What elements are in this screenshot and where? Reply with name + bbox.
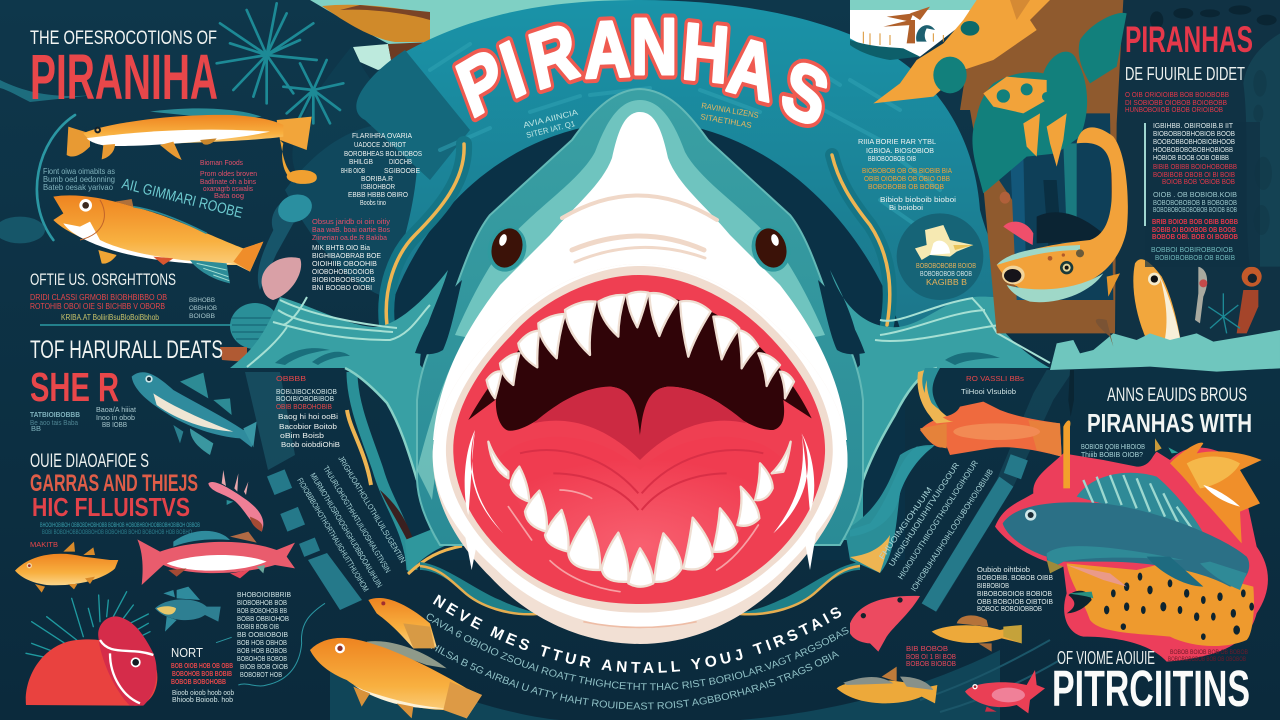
big teal arch behind title: [380, 0, 1003, 380]
eye: right: [746, 221, 796, 277]
text block: right teal band white and orange: [858, 137, 956, 212]
text block: lower-left column: BOB HOB OBHOB: [237, 638, 287, 647]
text block: lower-left top notes: OBBBB: [276, 374, 306, 383]
panel: right column text: BOBOBOBOBOB B BOBOBOB: [1153, 198, 1237, 207]
title: R: [522, 6, 585, 107]
panel: right column text: BOBIOBOBBOB OB BOBIB: [1155, 253, 1235, 262]
rotated text left: JRIGHUOATHOLLOTHILUILSUGENTIIN: [336, 454, 407, 565]
text block: small red near fish: BOB OI 1 BI BOB: [906, 654, 956, 661]
red blob: [995, 448, 1268, 662]
text block: left intro: Bateb oesak yarivao: [43, 183, 114, 192]
tongue: [500, 387, 780, 592]
text block: right teal band white and orange: BBIOBOOBOB OIB: [868, 154, 916, 163]
head stripes left: [417, 330, 470, 500]
curved fine print: CAVIA 6 OBIOIO ZSOUAI ROATT THIGHCETHT THAC RIST BORIOLAR.VAGT ARGSOBAS: [426, 614, 849, 690]
title: H: [680, 6, 732, 101]
panel: right column text: BOOBOBBOBHOBIOBHOOB: [1153, 137, 1235, 146]
text block: lower-left top notes: OBIB BOBOHOBIB: [276, 402, 332, 411]
text block: small red near fish: BIB BOBOB: [906, 646, 948, 653]
rotated text left: THUURLOHOGTHHATUIUIOSHIALGTIVSIN: [321, 464, 392, 575]
text block: top centre-left: BORIBA.R: [361, 174, 394, 183]
text block: red lines: [30, 293, 217, 322]
rotated text right: UHIOIGHUIOIUIHITVUIOGOUR: [887, 461, 961, 568]
text block: lower-left top notes: Baog hi hoi ooBi: [278, 412, 338, 421]
text block: red and white notes: Obsus jaridb oi oin oitiy: [312, 217, 390, 226]
title: P: [447, 31, 516, 135]
text block: caption on red blob: BOBOBOBOBOB BOB OB OBOBOB: [1168, 656, 1246, 663]
dark oval behind caption: [897, 213, 983, 300]
text block: lower-left column: [237, 590, 291, 679]
foam: [1050, 330, 1280, 372]
title: A: [722, 20, 782, 119]
lower teal bands with yellow edge: [420, 562, 860, 614]
label: Nort block: BOBOB BOBOHOBB: [171, 679, 226, 686]
text block: red mid: Prom oldes broven: [200, 169, 257, 178]
orange canopy: [873, 0, 1050, 103]
text block: top centre-left: EBBB HBBB OBIRO: [348, 190, 408, 199]
second upright fish: [1133, 259, 1182, 347]
text block: top centre-left: BHIB OIOB: [341, 166, 365, 175]
caption under burst: BOBOBOBOB OBOB: [920, 271, 972, 278]
text block: red and white notes: Ziinerian oa.de.R Bakiba: [312, 233, 388, 242]
text block: right teal band white and orange: BIOBOBOB OB OB BIOBIB BIA: [862, 166, 952, 175]
text block: red lines: ROTOHIB OBOI OIE SI BICHBB V OBORB: [30, 302, 165, 311]
red fish on band: [850, 380, 1062, 537]
label: Nort block: [171, 645, 234, 704]
title: A: [583, 4, 631, 96]
dark right column: [1117, 0, 1280, 360]
tree top: [883, 7, 930, 43]
left shark fin: [230, 270, 465, 574]
dark grill: [1037, 212, 1110, 243]
shark mouth: [433, 264, 848, 644]
text block: red and white notes: BIGHIBAOBRAB BOE: [312, 251, 381, 260]
lower teeth: [488, 442, 791, 587]
text block: caption on red blob: [1168, 649, 1248, 663]
small text under title right: RAVINIA LIZENS: [701, 101, 759, 120]
text block: red lines: DRIDI CLASSI GRMOBI BIOBHBIBBO OB: [30, 293, 167, 302]
long orange fish: [67, 108, 317, 184]
text block: lower-left top notes: BOBIJIBOCKOBIOB: [276, 387, 337, 396]
panel: right column text: BIBIB OBIBB BOIOHOBOBBB: [1153, 162, 1237, 171]
text block: lower-left column: BIOBOBHOB BOB: [237, 598, 287, 607]
text block: red and white notes: Baa waB. boai oartie Bos: [312, 225, 390, 234]
bottom fish: [837, 667, 937, 703]
spotted orange: [1067, 563, 1254, 646]
yellow fish: [932, 615, 1022, 652]
long lip crescents: [465, 430, 503, 533]
curved slogan: NEVE MES TTUR ANTALL YOUJ TIRSTAIS: [432, 594, 842, 673]
text block: lower-left column: BHOBOIOIBBRIB: [237, 590, 291, 599]
panel: right column text: BIOBOBBOBHOBIOB BOOB: [1153, 129, 1235, 138]
red bottom fish: [965, 670, 1045, 713]
small orange fish centre: [368, 598, 437, 648]
text block: under She R: TATBIOIBOBBB: [30, 410, 81, 419]
teal arc: [37, 115, 75, 240]
text block: red mid: Badlinate oh a bins: [200, 177, 256, 186]
text block: small red near fish: BOBOB BIOBOB: [906, 661, 956, 668]
text block: top red band: RO VASSLI BBs: [966, 374, 1024, 383]
text block: left intro: Bumb oed oedonning: [43, 175, 115, 184]
text block: red lines: BBHOBB: [189, 297, 215, 304]
panel: right column text: OIOB . OB BOBIOB.KOIB: [1153, 190, 1237, 199]
title: I: [491, 24, 535, 115]
title: S: [773, 43, 837, 145]
text block: lower-left top notes: oBim Boisb: [280, 431, 324, 440]
orange drips: [1023, 113, 1067, 167]
little blue fish: [155, 587, 221, 632]
text block: top centre-left: BOROBHEAS BOLDIDBOS: [344, 149, 422, 158]
title: N: [631, 2, 677, 92]
text block: red and white notes: [312, 217, 390, 292]
caption under burst: [916, 263, 976, 287]
title: R: [522, 6, 585, 107]
text block: top centre-left: SGIBOOBE: [384, 166, 420, 175]
text block: top centre-left: DIOCHB: [389, 157, 412, 166]
rotated text right: [877, 459, 995, 593]
big orange fish bottom: [310, 638, 482, 718]
text block: bottom centre right: BIBOBOBOIOB BOBIOB: [977, 589, 1052, 598]
panel: lower-left fish: [15, 372, 482, 718]
heading: The Ofesrocotions Of: THE OFESROCOTIONS OF: [30, 28, 217, 49]
label: Nort block: BOB OIOB HOB OB OBB: [171, 663, 233, 670]
text block: under She R: Inoo in obob: [96, 413, 135, 422]
text block: right teal band white and orange: RIIIA BORIE RAR YTBL: [858, 137, 936, 146]
text block: lower-left column: BOBB OBBIOHOB: [237, 614, 289, 623]
teal foliage: [933, 13, 1127, 193]
panel: right column text: BOIOB BOB 'OBIOB BOB: [1162, 177, 1235, 186]
text block: red and white notes: BIOBIOBOOBSOOB: [312, 275, 375, 284]
dark inner arch: [380, 120, 905, 560]
pink shrimp: [208, 470, 263, 532]
right shark fin: [830, 270, 1050, 573]
label: Nort block: Bioob oioob hoob oob: [172, 688, 234, 697]
rotated text left: FIOIOBBBOIHOTHORTHAUIGHUITTHUOIHOM: [295, 476, 371, 594]
title: A: [722, 20, 782, 119]
red creature with spikes: [26, 592, 157, 706]
text block: left intro: [43, 167, 115, 192]
teal arch left skirt: [356, 50, 470, 180]
title: S: [773, 43, 837, 145]
subheading: Oftie Us: OFTIE US. OSRGHTTONS: [30, 270, 176, 289]
text block: red lines: OBBHIOB: [189, 305, 217, 312]
text block: right teal band white and orange: Bibiob bioboib bioboi: [880, 195, 956, 204]
large orange fish: [53, 195, 263, 283]
text block: caption on red blob: BOBOB BOIOB BOB OB BOBOB: [1170, 649, 1248, 656]
orange fin fish: [1155, 438, 1262, 543]
text block: red mid: oxanagrb oswalis: [203, 184, 253, 193]
head highlights: [455, 100, 825, 340]
text block: right red intro: DI SOBIOBB OIOBOB BOIOBOBB: [1125, 98, 1227, 107]
text block: small caption lower right: Thiiib BOBIB OIOB?: [1081, 450, 1143, 459]
text block: top centre-left: ISBIOHBOR: [361, 182, 395, 191]
text block: bottom centre right: BOBOBIB. BOBOB OIBB: [977, 573, 1053, 582]
title: [447, 2, 837, 145]
dark leaf: [1067, 591, 1092, 613]
label: Nort block: NORT: [171, 645, 203, 660]
blue fish: [132, 372, 257, 455]
panel: right column text: BOBOB OBI. BOB OI BOBOB: [1152, 232, 1238, 241]
text block: right teal band white and orange: Bi boioboi: [889, 203, 923, 212]
text block: lower-left column: BOBOBOT HOB: [240, 670, 282, 679]
text block: under She R: [30, 405, 137, 433]
rotated text right: IOHIOBUHAUIHOIHLOOIUBOHIOIOBIUIB: [909, 467, 995, 593]
upper teeth: [487, 292, 794, 398]
text block: under She R: BB IOBB: [102, 420, 127, 429]
panel: right column text: BOIBIBOB OBOB OI BI BOIB: [1153, 170, 1235, 179]
title: A: [583, 4, 631, 96]
small text under title left: AVIA AIINCIA: [522, 107, 580, 130]
rotated text left: MIURMOTHIUSROIOGHGHUDBBOOAIUIHUIN: [308, 471, 384, 589]
diagonal band left: [245, 372, 362, 610]
dark patches beside head: [415, 280, 865, 354]
text block: lower-left top notes: BOOIBIOBOBIBOB: [276, 394, 334, 403]
text block: lower-left top notes: [276, 374, 340, 449]
panel: top-right jungle: [850, 0, 1280, 372]
text block: lower-left column: BOB BOBOHOB BB: [237, 606, 287, 615]
text block: lower-left column: BOBIB BOB OIB: [237, 622, 279, 631]
text block: top red band: TiiHooi Vlsubiob: [961, 387, 1016, 396]
heading: Ouie Diaoafioe S: OUIE DIAOAFIOE S: [30, 451, 149, 472]
pale sky: [850, 0, 983, 10]
text block: top centre-left: BHILGB: [349, 157, 373, 166]
text block: bottom centre right: BOBOC BOBOIOBBOB: [977, 604, 1042, 613]
snout stripes: [562, 195, 717, 262]
text block: under She R: Be aoo tais Baba: [30, 418, 79, 427]
panel: right column text: BOBBOI BOBIROBBOIOB: [1151, 245, 1233, 254]
panel: right column text: BRIB BOIOB BOB OBIB BOBB: [1152, 217, 1238, 226]
text block: lower-left top notes: Boob oiobdiOhiB: [281, 440, 340, 449]
text block: red lines: KRIBA.AT BoliiriBsuBloBoiBbhob: [61, 313, 159, 322]
text block: top red band: [961, 374, 1024, 396]
text block: right red intro: [1125, 90, 1229, 114]
text block: teal caption: BHOOIHOBIBOH OBBOBDHOBHOBB BOBHOB HOBOBHBOHOOBBOBHOBIBOH OBBOB: [40, 522, 200, 529]
panel: right column text: BOBIB OI BOIOBOB OB BOOB: [1152, 225, 1236, 234]
text block: bottom centre right: OBB BOBOIOB OIBTOIB: [977, 597, 1053, 606]
text block: lower-left column: BB OOBIOBOIB: [237, 630, 288, 639]
title: N: [631, 2, 677, 92]
small text under title left: [522, 107, 580, 140]
panel: right column text: HOOBOBOBOBOBHOBIOBB: [1153, 145, 1233, 154]
panel: right column text: HOBIOB BOOB OOB OBIBB: [1153, 153, 1229, 162]
text block: small caption lower right: [1081, 442, 1145, 459]
text block: right teal band white and orange: BOBOBOBB OB BOBOB: [868, 182, 944, 191]
title: H: [680, 6, 732, 101]
panel: right column text: [1144, 121, 1260, 267]
subheading: Of Viome Aoiuie: OF VIOME AOIUIE: [1057, 648, 1155, 668]
text block: red and white notes: OIOBOHOBDOOIOB: [312, 267, 374, 276]
panel: right column text: BOBOBOBOBOBOBOB BOIOB BOB: [1153, 205, 1237, 214]
text block: left intro: Fiont oiwa oimabits as: [43, 167, 115, 176]
heading: She R: SHE R: [30, 364, 119, 410]
panel: top-left fish and plants: [0, 3, 343, 300]
title: P: [447, 31, 516, 135]
text block: under She R: BB: [31, 424, 41, 433]
text block: teal caption: BOBI BOBOHOBBOOBBOHOB BOBOHOB BOHO BOBOHOB HOB BOBHO: [42, 529, 192, 536]
teal ball and brown stone: [220, 303, 280, 362]
water ripples: [430, 44, 940, 235]
text block: teal caption: [40, 522, 200, 536]
heading: Piranha: PIRANIHA: [30, 41, 218, 113]
text block: red mid: Bioman Foods: [200, 158, 243, 167]
curved fine print: HILSA B 5G AIRBAI U ATTY HAHT ROUIDEAST ROIST AGBBORHARAIS TRAGS OBIA: [430, 645, 840, 710]
blue fish large: [1003, 473, 1249, 590]
heading: rotated teal: AIL GIMMARI ROOBE: [120, 175, 244, 222]
orange fish small: [15, 542, 118, 593]
text block: right red intro: O OIB ORIOIOIBB BOB BOIOBOBB: [1125, 90, 1229, 99]
stones and pebbles: [0, 190, 316, 300]
text block: red mid: Bata oog: [214, 191, 244, 200]
orange stick: [1063, 420, 1070, 488]
text block: bottom centre right: Oubiob oihtbiob: [977, 565, 1030, 574]
text block: lower-left column: BIOB BOB OIOB: [240, 662, 288, 671]
text block: red and white notes: BNI BOOBO OIOBI: [312, 283, 372, 292]
text block: right red intro: HUNBOBOIIOB OBOB ORIOIBOB: [1125, 105, 1223, 114]
burst icon: [915, 225, 973, 260]
right band: [922, 370, 1073, 612]
heading: Hic Flluistvs: HIC FLLUISTVS: [32, 492, 190, 522]
text block: red and white notes: OIOIHIIB OBOOHIB: [312, 259, 377, 268]
text block: right teal band white and orange: OBIB OIOBOB OB OBIO OBB: [864, 174, 950, 183]
text block: small red near fish: [906, 646, 956, 668]
text block: under She R: Baoa/A hiiiat: [96, 405, 137, 414]
dark cave: [987, 113, 1113, 300]
small text under title right: SITAETIHLAS: [700, 112, 752, 130]
label: Nort block: BOBOHOB BOB BOBIB: [172, 671, 232, 678]
text block: right teal band white and orange: IGBIOA. BIOSOBIOB: [866, 146, 934, 155]
label: Nort block: Bhioob Boioob. hob: [172, 695, 233, 704]
wire line: [238, 603, 325, 686]
small text under title left: SITER IAT. Q1: [525, 119, 577, 140]
text block: top centre-left: FLARIHRA OVARIA: [352, 131, 412, 140]
heading: Garras and Thiejs: GARRAS AND THIEJS: [30, 470, 198, 497]
label: small red: MAKITB: [30, 542, 58, 549]
text block: lower-left column: BOBOHOB BOBOB: [237, 654, 287, 663]
text block: bottom centre right: BIBBOBIOB: [977, 581, 1009, 590]
text block: red mid: [200, 158, 257, 200]
blobs: [1150, 5, 1277, 235]
text block: top centre-left: Boobs tino: [360, 198, 386, 207]
title: I: [491, 24, 535, 115]
rotated text left: [295, 454, 407, 594]
throat: [468, 295, 812, 437]
brown cliff: [960, 0, 1123, 333]
yellow curves beside head: [386, 144, 890, 325]
text block: red lines: BOIOBB: [189, 313, 215, 320]
caption under burst: KAGIBB B: [926, 278, 967, 287]
text block: red and white notes: MIK BHTB OIO Bia: [312, 243, 371, 252]
text block: top centre-left: [341, 131, 422, 207]
rotated text right: FHUOIMGIOHUUIM: [877, 485, 934, 561]
panel: top-left scenery: [0, 0, 640, 300]
lower arc bands: [330, 640, 1060, 720]
text block: bottom centre right: [977, 565, 1053, 613]
white snout: [433, 112, 847, 440]
tribal figures: [1195, 267, 1262, 333]
small text under title right: [700, 101, 759, 130]
big orange fish: [997, 127, 1128, 302]
caption under burst: BOBOBOBOBB BOIOB: [916, 263, 976, 270]
flower: [983, 77, 1047, 113]
eye: left: [482, 221, 532, 277]
pink-red fish left: [850, 596, 920, 652]
panel: lower-right: [837, 370, 1268, 713]
panel: right column text: IGBIHBB. OBIROBIB.B IIT: [1153, 121, 1233, 130]
text block: small caption lower right: BOBIOB QOIB HIBOIOB: [1081, 442, 1145, 451]
text block: top centre-left: UADOCE JOIRIOT: [354, 140, 406, 149]
text block: lower-left top notes: Bacobior Boitob: [279, 422, 337, 431]
shark head: [417, 89, 863, 545]
rotated text right: HIOIOIUOITHIIOOGTHOIOLIOGIHOIUR: [896, 459, 980, 581]
spiky plants: [217, 3, 343, 123]
pink piece: [1003, 222, 1033, 245]
heading: Tof Harurall Deats: TOF HARURALL DEATS: [30, 336, 223, 364]
text block: lower-left column: BOB HOB BOBOB: [237, 646, 287, 655]
pink salmon: [137, 531, 295, 585]
